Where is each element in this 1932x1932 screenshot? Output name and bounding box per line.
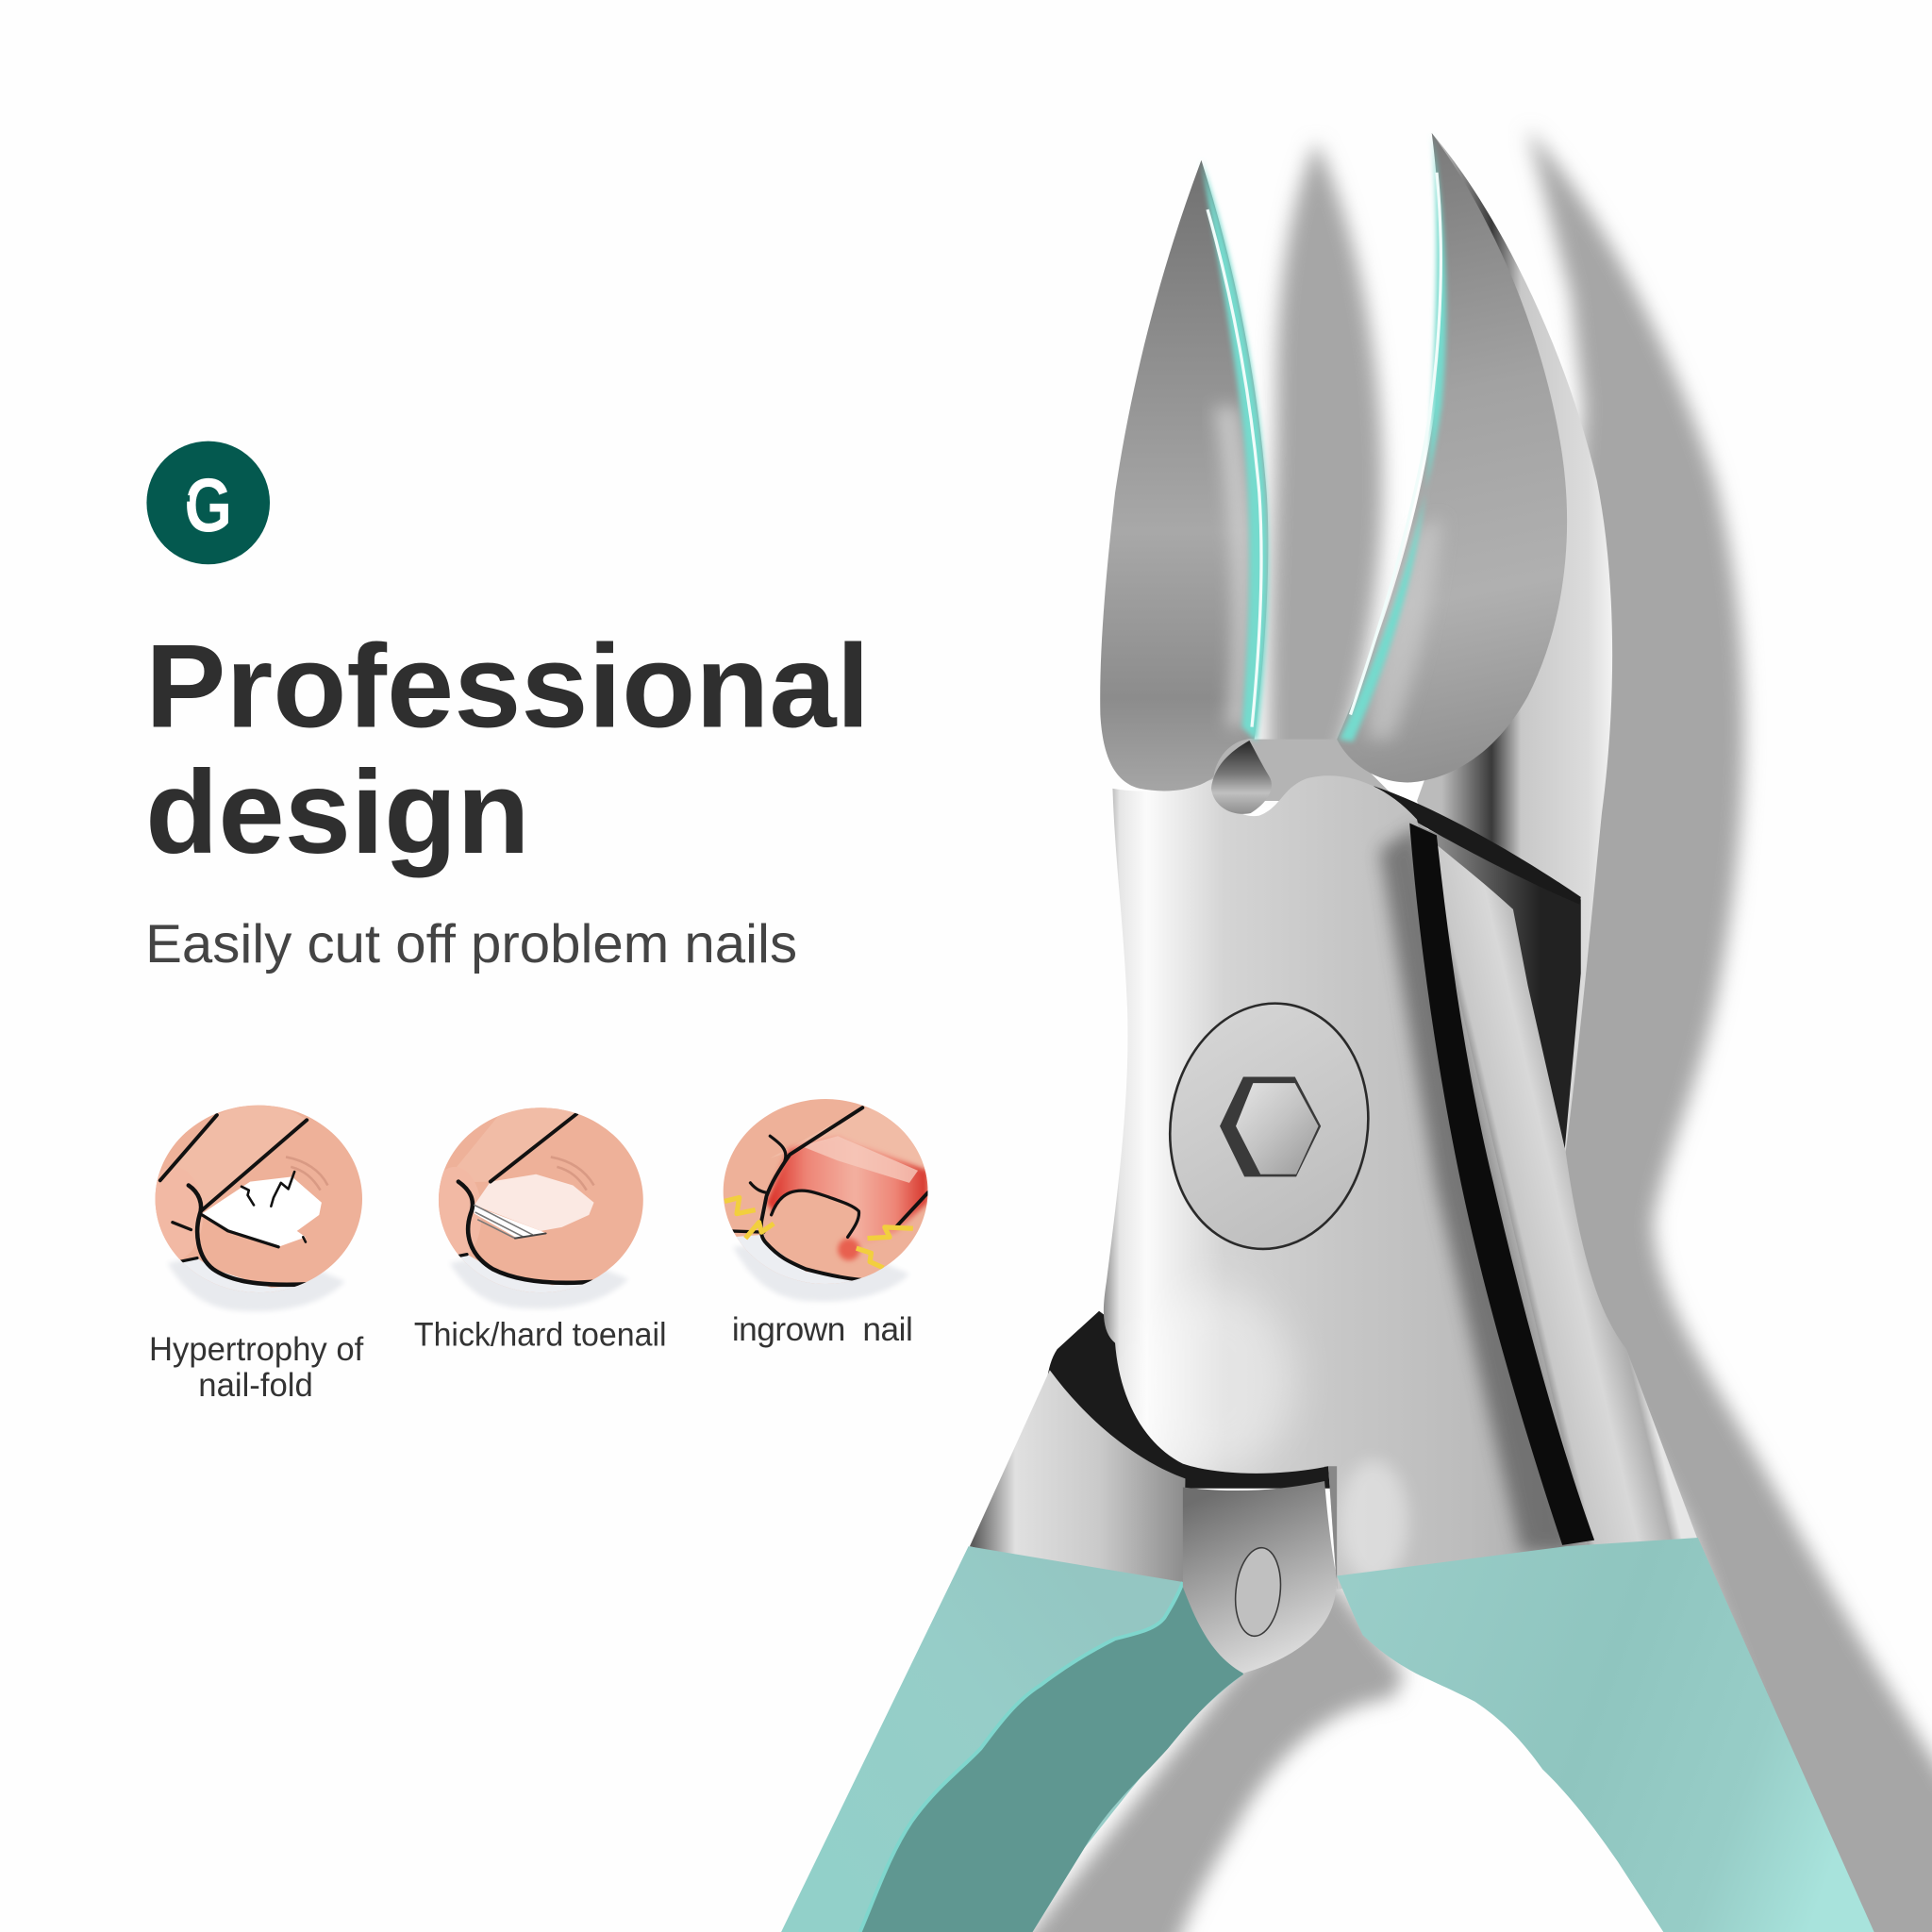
left cutting edge glow	[1201, 160, 1268, 741]
right cutting edge glow	[1340, 133, 1446, 741]
left blade sheen	[1214, 407, 1252, 727]
nail condition icons	[144, 1091, 937, 1319]
nipper tool	[781, 133, 1874, 1932]
brand badge	[146, 441, 270, 564]
left handle highlight	[860, 1582, 1183, 1932]
title: Professional	[145, 620, 870, 753]
icon: ingrown nail	[723, 1099, 928, 1302]
brand badge: G	[185, 462, 232, 548]
subtitle: Easily cut off problem nails	[145, 914, 797, 974]
central body	[1104, 775, 1590, 1590]
right handle	[1337, 1538, 1874, 1932]
right handle-side body	[1417, 820, 1698, 1602]
hex socket	[1220, 1077, 1321, 1176]
tab rivet	[1231, 1545, 1285, 1639]
body shading	[1134, 825, 1577, 1590]
right blade sheen	[1368, 518, 1441, 740]
patch between jaws	[1201, 740, 1398, 801]
icon: hypertrophy of nail-fold	[155, 1106, 362, 1312]
title	[145, 620, 870, 878]
tab plate	[1183, 1481, 1337, 1674]
right blade	[1337, 133, 1567, 782]
left blade	[1100, 160, 1268, 791]
label: thick hard toenail: Thick/hard toenail	[414, 1316, 667, 1353]
right jaw back bevel	[1417, 133, 1612, 1158]
lock tab	[1183, 1481, 1337, 1674]
bolt head	[1155, 991, 1384, 1262]
pivot bolt	[1155, 991, 1384, 1262]
cast shadow of the nipper	[1010, 129, 1932, 1932]
blade notch hole	[1211, 741, 1272, 814]
icon: thick hard toenail	[438, 1108, 643, 1309]
icon labels	[149, 1311, 913, 1404]
title: design	[145, 745, 530, 878]
left handle dark inner face	[860, 1582, 1243, 1932]
left lever arm	[970, 1370, 1185, 1602]
dark recess below shoulder	[1408, 821, 1581, 1148]
icon labels: nail-fold	[198, 1367, 313, 1404]
label: ingrown nail: ingrown nail	[732, 1311, 913, 1348]
black stripe	[1409, 823, 1594, 1545]
black shoulder line	[1374, 786, 1581, 905]
label: hypertrophy: Hypertrophy of	[149, 1331, 363, 1368]
left handle	[781, 1546, 1243, 1932]
lever arm dark band	[1042, 1311, 1331, 1489]
